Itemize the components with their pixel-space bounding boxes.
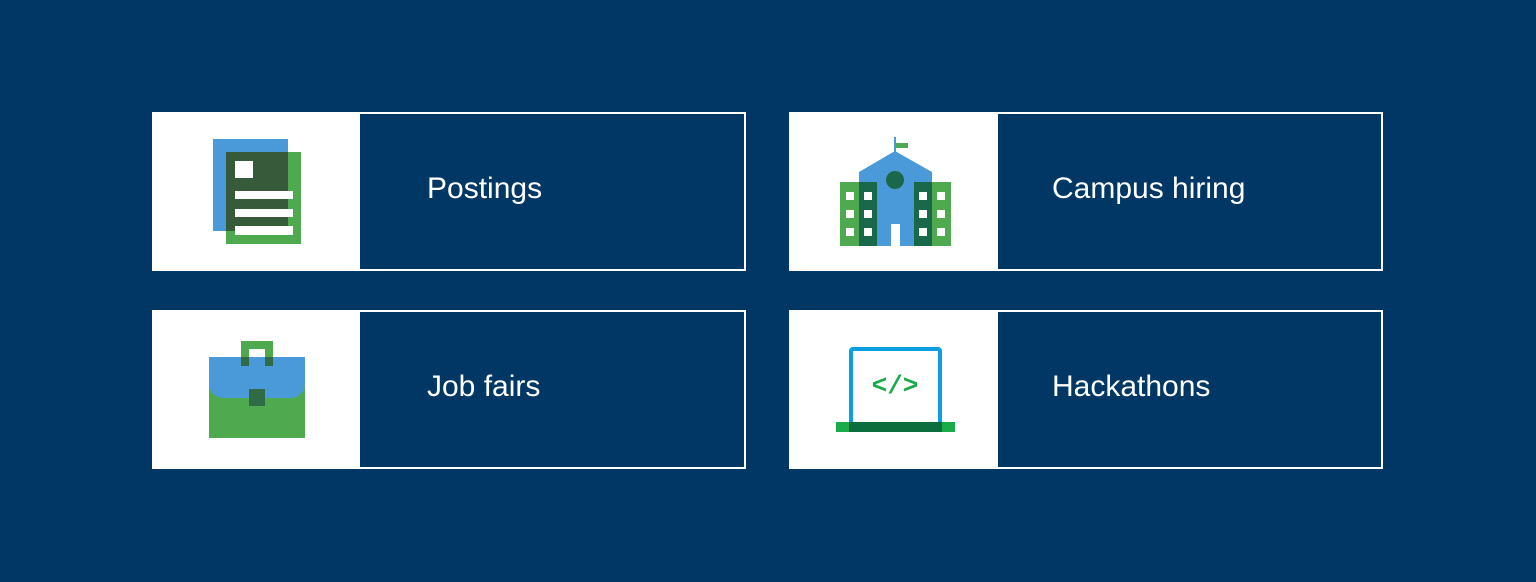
card: Postings (152, 112, 746, 271)
label: Hackathons: Hackathons (1052, 370, 1210, 403)
icon: laptop with code (791, 312, 998, 467)
card: Job fairs (152, 310, 746, 469)
label: Job fairs: Job fairs (427, 370, 540, 403)
label: Campus hiring: Campus hiring (1052, 172, 1245, 205)
card: Campus hiring (789, 112, 1383, 271)
icon: laptop with code: </> (872, 371, 918, 401)
icon: document (154, 114, 360, 269)
card: Hackathons (789, 310, 1383, 469)
icon: briefcase (154, 312, 360, 467)
label: Postings: Postings (427, 172, 542, 205)
icon: school building (791, 114, 998, 269)
